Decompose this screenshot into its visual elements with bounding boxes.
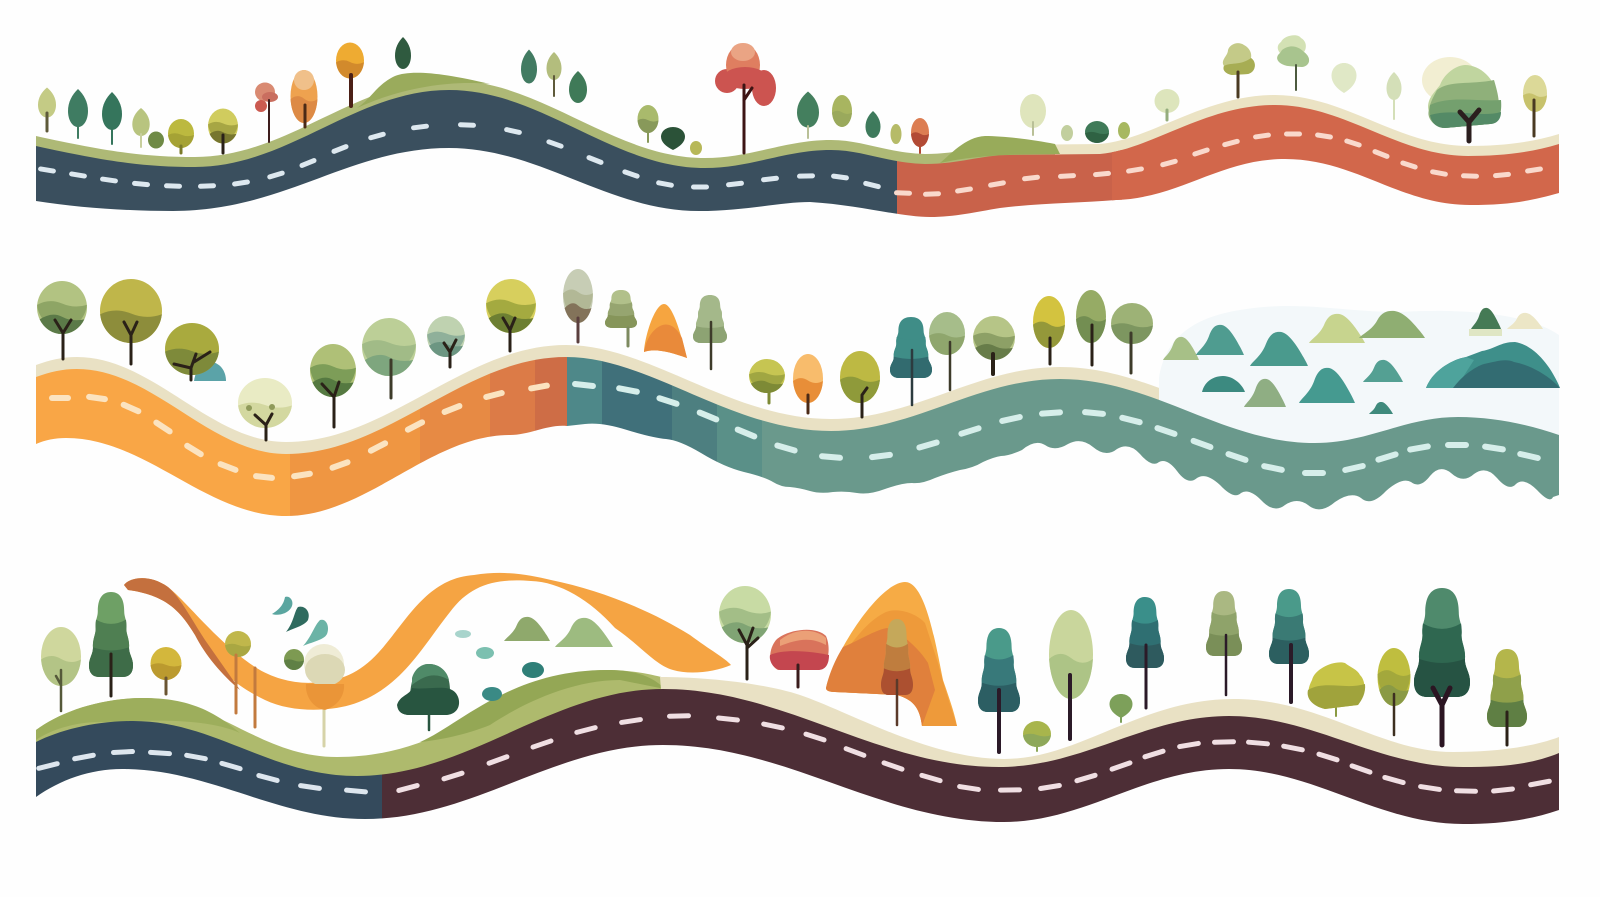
hill: small green (555, 618, 613, 647)
tree: orange red (911, 118, 929, 153)
tree (37, 281, 87, 359)
island: sage (1244, 379, 1286, 407)
tree: olive (1487, 649, 1527, 745)
tree (1076, 290, 1106, 365)
hill: orange peak (644, 304, 687, 358)
tree: bushy pale green (1277, 35, 1309, 90)
lane dashes: teal section (584, 385, 1529, 473)
tree (840, 351, 880, 417)
panel: road one (36, 35, 1559, 217)
tree: grey brown (563, 269, 593, 342)
shrub: round (284, 649, 304, 670)
tree: tall pale (1049, 610, 1093, 739)
tree (973, 316, 1015, 374)
ribbon: orange swoop (124, 573, 731, 710)
island: teal (1299, 368, 1355, 403)
tree (310, 344, 356, 427)
leaf tree (521, 50, 537, 84)
tree: yellow (1378, 648, 1410, 735)
leaf tree (866, 111, 880, 138)
island: low teal dome (1202, 376, 1245, 392)
tree (797, 92, 819, 138)
hill: tall orange peak (826, 582, 957, 726)
tree (132, 108, 150, 147)
tree: large layered green (1422, 57, 1501, 141)
island: small teal (1369, 402, 1393, 414)
island: teal (1196, 325, 1244, 355)
island: sage (1163, 337, 1199, 360)
blob (522, 662, 544, 678)
leaf tree (395, 37, 411, 69)
shrub (1023, 721, 1051, 751)
tree (41, 627, 81, 711)
tree: orange (793, 354, 823, 413)
tree (165, 323, 219, 380)
ribbon: brown tail (124, 578, 240, 690)
tree (38, 88, 56, 131)
tree: teal conifer (1126, 597, 1164, 708)
road surface: navy and maroon (36, 689, 1559, 824)
tree: pale on ribbon (304, 644, 345, 746)
tree: bushy olive (1223, 43, 1255, 97)
tree (208, 108, 238, 153)
tree (890, 124, 902, 144)
panel: road three (0, 573, 1582, 830)
tree (1523, 75, 1547, 136)
tree: orange (290, 70, 318, 127)
tree: dark green (397, 664, 459, 730)
tree (929, 312, 965, 390)
tree: teal conifer (890, 317, 932, 405)
tree (1111, 303, 1153, 373)
hill: olive mound over road one (357, 73, 490, 108)
island: dark green with pale base (1469, 308, 1502, 336)
drop: dark teal (286, 607, 309, 632)
hill: olive mound at colour change (940, 136, 1060, 163)
bush: olive (1308, 662, 1365, 716)
tree: pale slender (1386, 72, 1402, 119)
blob (476, 647, 494, 659)
tree: conifer in peak (881, 619, 913, 725)
tree: pale (1154, 89, 1180, 120)
tree (68, 89, 88, 138)
lane dashes: navy section (48, 752, 356, 791)
shrub (1061, 125, 1073, 141)
tree: pale (1332, 63, 1356, 93)
background: pale mist behind islands (1159, 306, 1559, 445)
shrub (661, 127, 685, 150)
lane dashes: orange section (60, 387, 539, 477)
post (254, 668, 256, 727)
tree (100, 279, 162, 364)
lane dashes: navy section (47, 125, 872, 187)
hill: dark olive left (36, 698, 240, 740)
verge: grass and cream strip (36, 83, 1559, 168)
tree: conifer olive (605, 290, 637, 346)
tree: conifer sage (693, 295, 727, 369)
tree (1033, 296, 1065, 364)
tree (832, 95, 852, 127)
drop: teal (272, 597, 292, 615)
tree (719, 586, 771, 679)
panel: road two (0, 269, 1562, 530)
shrub (1118, 122, 1130, 139)
tree (362, 318, 416, 398)
tree (638, 105, 658, 142)
lane dashes: maroon section (408, 716, 1540, 791)
blob (455, 630, 471, 638)
tree: small red (255, 82, 278, 142)
tree: large dark green (1414, 588, 1470, 745)
tree: yellow (150, 647, 182, 694)
hill: dark olive right (420, 670, 665, 742)
road surface: orange to teal (36, 357, 1559, 516)
shrub (1110, 694, 1132, 722)
tree: red canopy (715, 43, 776, 153)
tree: red bush (770, 630, 829, 687)
road surface: navy and terracotta (36, 90, 1559, 217)
lane dashes: terracotta section (903, 134, 1534, 194)
leaf tree (569, 71, 587, 103)
tree (749, 359, 785, 403)
shrub (690, 141, 702, 155)
tree: pale (238, 378, 292, 440)
island: cream (1507, 313, 1543, 329)
dome: teal rock (194, 362, 226, 381)
shrub (148, 132, 164, 148)
island: teal (1363, 360, 1403, 382)
drop: light teal (303, 620, 328, 646)
island: green (1359, 311, 1425, 338)
tree: amber (336, 42, 364, 106)
tree (427, 316, 465, 367)
hill: small sage (504, 617, 550, 641)
tree: tall green (89, 592, 133, 696)
tree: sage conifer (1206, 591, 1242, 695)
island: large teal range (1426, 342, 1560, 388)
verge: cream (660, 677, 1559, 795)
tree (168, 119, 194, 153)
tree: pale (1020, 94, 1046, 135)
island: lime (1309, 314, 1365, 343)
tree: teal conifer (978, 628, 1020, 752)
tree (546, 52, 562, 96)
island: teal (1250, 332, 1308, 366)
tree: round dark (1085, 121, 1109, 143)
verge: grass (36, 670, 665, 795)
verge: cream strip (36, 345, 1159, 454)
blob (482, 687, 502, 701)
tree (102, 92, 122, 144)
tree: olive on ribbon (225, 631, 251, 713)
tree (486, 279, 536, 351)
tree: teal conifer (1269, 589, 1309, 702)
